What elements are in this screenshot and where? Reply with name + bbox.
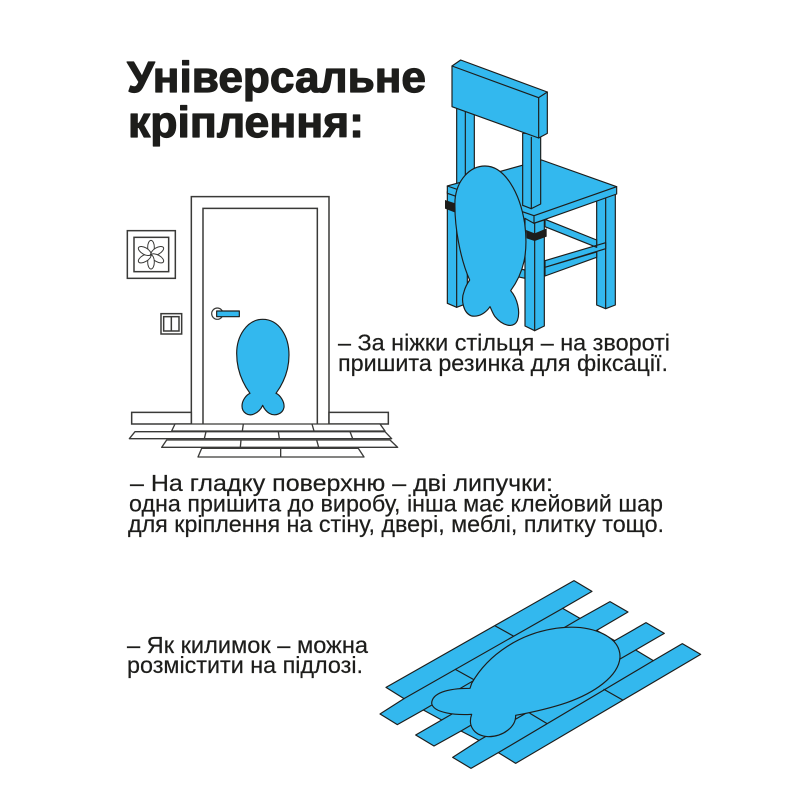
elastic strap right — [526, 228, 547, 241]
fish cushion on floor — [432, 627, 620, 737]
door leaf — [203, 208, 317, 424]
chair far right leg — [597, 193, 615, 309]
text: smooth surface attachment: для кріплення на стіну, двері, меблі, плитку тощо. — [128, 511, 664, 537]
chair front leg — [525, 218, 544, 331]
illustration: fish rug on wooden floor — [380, 581, 701, 768]
text: rug use — [127, 632, 368, 678]
floor planks — [380, 581, 701, 768]
title — [127, 53, 426, 147]
text: smooth surface attachment: одна пришита до виробу, інша має клейовий шар — [129, 490, 663, 516]
text: smooth surface attachment: – На гладку поверхню – дві липучки: — [130, 470, 553, 496]
door frame — [191, 197, 329, 424]
text: rug use: – Як килимок – можна — [127, 632, 368, 658]
text: rug use: розмістити на підлозі. — [127, 652, 363, 678]
flower — [137, 240, 165, 269]
chair backrest — [452, 60, 547, 138]
chair back left post — [457, 107, 474, 190]
door handle — [212, 308, 239, 319]
light switch — [161, 314, 182, 334]
fish cushion on chair — [455, 166, 526, 325]
illustration: chair with fish cushion — [445, 60, 617, 331]
illustration: door with fish cushion — [127, 197, 398, 457]
title: Універсальне — [127, 53, 426, 102]
elastic strap left — [445, 200, 455, 213]
title: кріплення: — [128, 98, 364, 147]
picture on wall — [127, 231, 175, 278]
floor tiles — [129, 424, 398, 457]
skirting boards — [132, 412, 388, 424]
text: chair attachment: пришита резинка для фіксації. — [338, 350, 668, 376]
text: smooth surface attachment — [128, 470, 664, 537]
chair back right post — [523, 133, 541, 209]
chair seat — [447, 160, 617, 223]
chair far left leg — [447, 192, 467, 307]
chair stretchers — [463, 219, 606, 278]
text: chair attachment: – За ніжки стільця – на звороті — [338, 330, 670, 356]
text: chair attachment — [338, 330, 670, 376]
fish cushion on door — [237, 319, 289, 415]
